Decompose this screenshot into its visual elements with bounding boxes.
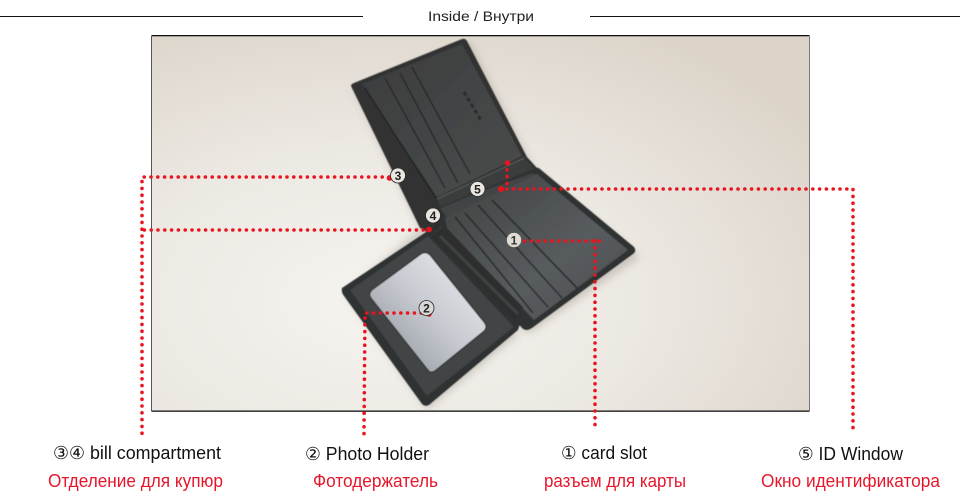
badge 4: [426, 208, 440, 223]
callout anchor dots: [387, 160, 521, 317]
id window: [370, 253, 486, 372]
badge 5: [470, 182, 485, 196]
upper flap: [351, 39, 537, 232]
right panel slots: [455, 200, 577, 313]
header rule left: [0, 16, 363, 17]
lower right card panel: [437, 168, 635, 330]
label: photo holder: ② Photo Holder: [305, 444, 429, 464]
wallet shadow: [345, 42, 640, 410]
label: id window: [761, 444, 941, 491]
callout 1 line: [518, 239, 600, 243]
badge 4: 4: [430, 209, 437, 223]
label: card slot: [544, 443, 686, 491]
header rule right: [590, 16, 960, 17]
callout 2 line: [364, 313, 428, 434]
title: Inside / Внутри: [428, 8, 534, 24]
label: bill compartment: ③④ bill compartment: [53, 443, 221, 463]
badge 5: 5: [474, 182, 481, 196]
embossed logo: [464, 92, 482, 122]
callout 5 line: [500, 189, 853, 432]
badge 2: [419, 300, 434, 316]
badge 2: 2: [423, 302, 430, 316]
callout lines: [142, 163, 853, 436]
photo panel background: [151, 35, 810, 412]
flap card slots: [365, 67, 470, 200]
label: bill compartment: Отделение для купюр: [48, 471, 223, 491]
badge 3: 3: [395, 169, 402, 183]
wallet photo: [342, 39, 640, 410]
inner fold band: [432, 227, 523, 320]
wallet base fill: [420, 205, 445, 236]
label: id window: ⑤ ID Window: [798, 444, 904, 464]
flap lower band: [437, 158, 535, 209]
label: id window: Окно идентификатора: [761, 471, 941, 491]
badge 3: [390, 168, 406, 183]
label: bill compartment: [48, 443, 223, 491]
badge 1: [506, 232, 522, 248]
badge 1: 1: [511, 234, 518, 248]
label: photo holder: [305, 444, 438, 491]
callout 3 4 line: [142, 177, 389, 436]
label: photo holder: Фотодержатель: [313, 471, 438, 491]
label: card slot: ① card slot: [561, 443, 647, 463]
label: card slot: разъем для карты: [544, 471, 686, 491]
photo holder flap: [342, 227, 524, 406]
